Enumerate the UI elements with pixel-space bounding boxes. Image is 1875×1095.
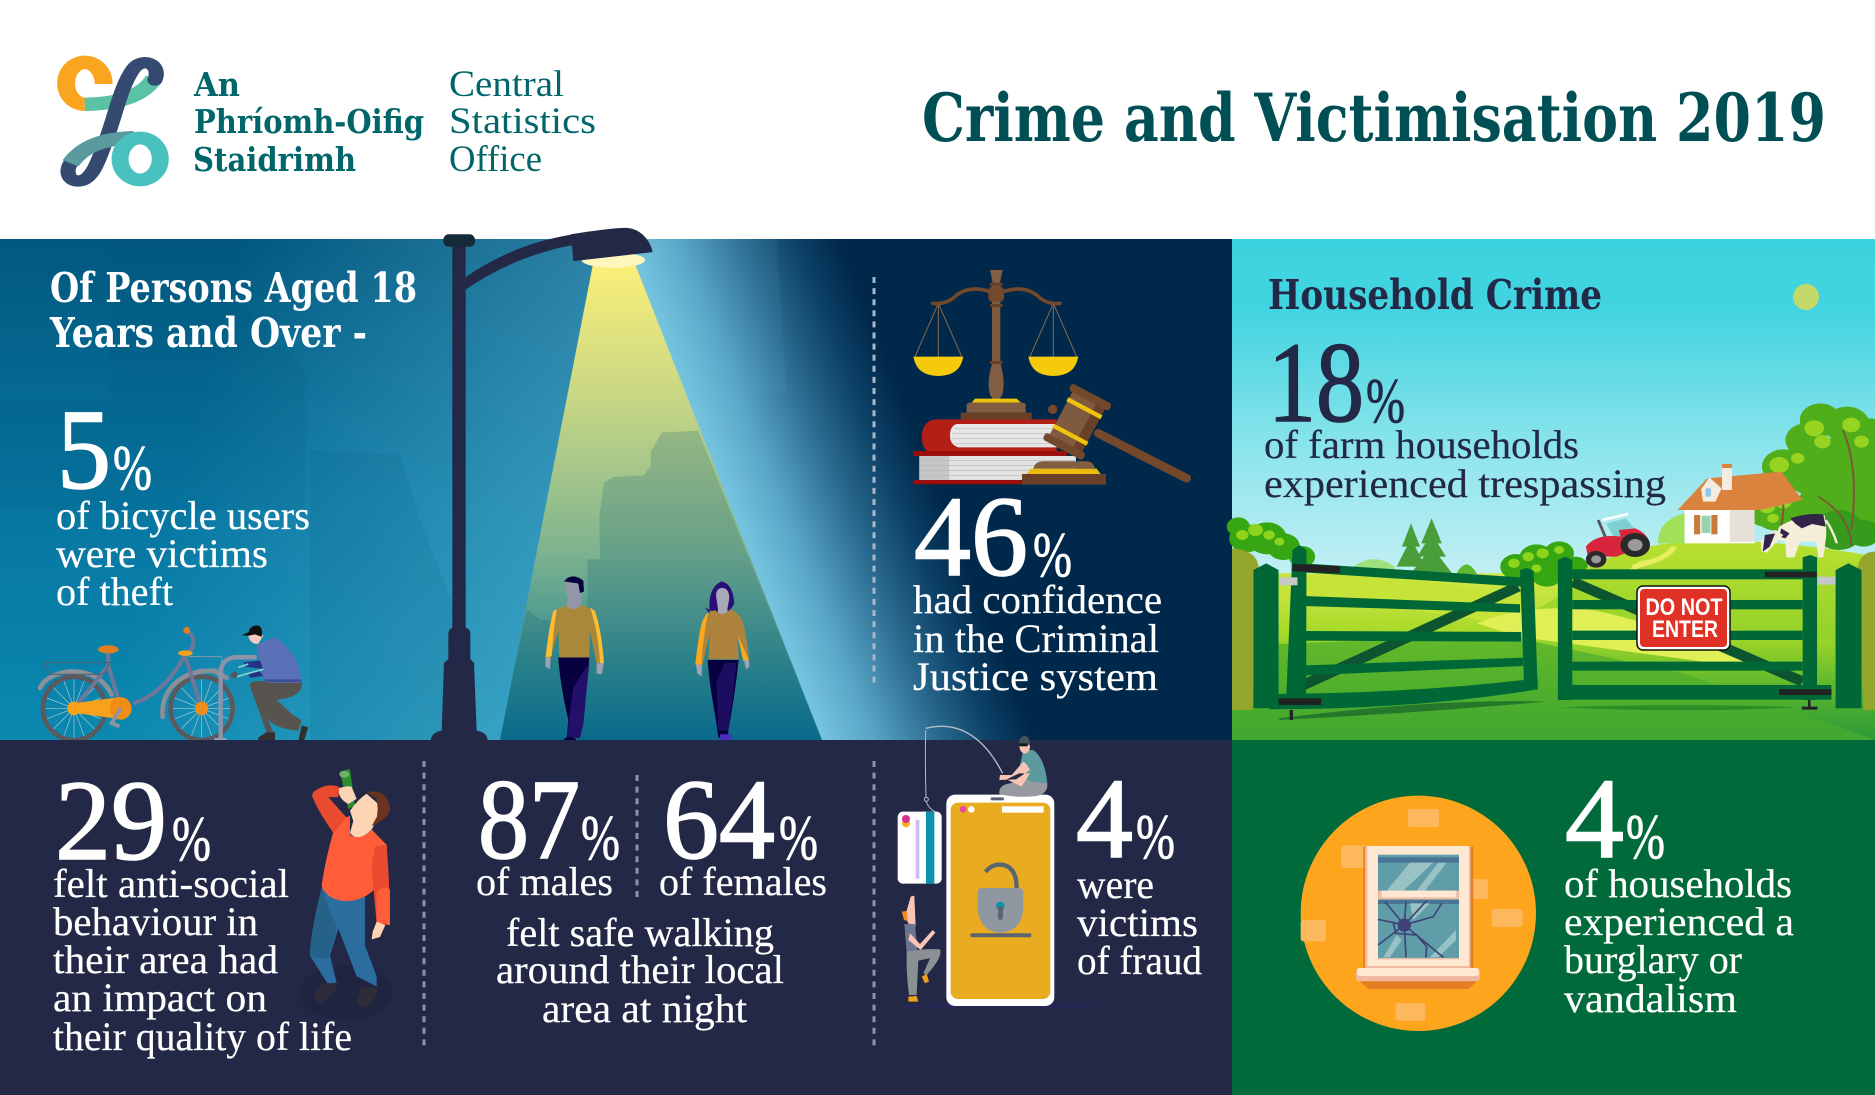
stat: 18% farm trespassing: of farm households	[1264, 422, 1579, 467]
stat: 4% burglary or vandalism: 4	[1565, 755, 1624, 882]
icon: scales of justice with books and gavel	[913, 270, 1187, 485]
stat: 18% farm trespassing	[1264, 319, 1666, 506]
farmhouse	[1658, 464, 1803, 543]
stat: 29% anti-social behaviour	[53, 757, 352, 1059]
dotted divider: third column	[872, 761, 876, 1048]
stat: 29% anti-social behaviour: their quality of life	[53, 1014, 352, 1059]
stat: 5% bicycle theft: of theft	[56, 569, 173, 614]
heading: of persons aged 18 years and over: Years and Over -	[49, 309, 367, 357]
thief	[231, 625, 308, 741]
stat: 29% anti-social behaviour: behaviour in	[53, 899, 258, 944]
logo English name: Statistics	[449, 101, 596, 142]
stat: 5% bicycle theft: 5	[57, 386, 111, 513]
icon: sun	[1793, 284, 1819, 310]
logo English name	[449, 64, 596, 180]
icon: broken window in orange circle	[1301, 796, 1536, 1031]
stat: 4% victims of fraud: %	[1136, 801, 1175, 872]
stat: 46% confidence in justice system: had confidence	[913, 577, 1162, 622]
stat: 87% of males and 64% of females felt safe: %	[581, 802, 620, 873]
stat: 5% bicycle theft: were victims	[56, 531, 268, 576]
climbing person	[902, 896, 941, 1002]
dotted divider: first column	[422, 761, 426, 1048]
stat: 87% of males and 64% of females felt safe: %	[779, 802, 818, 873]
heading: of persons aged 18 years and over: Of Persons Aged 18	[50, 264, 417, 312]
credit card on hook	[898, 730, 942, 884]
hedges	[1232, 548, 1875, 710]
header background	[0, 0, 1875, 239]
smartphone	[946, 795, 1054, 1006]
distant hills	[1232, 573, 1534, 633]
stat: 5% bicycle theft: of bicycle users	[56, 493, 310, 538]
stat: 4% victims of fraud: were	[1077, 862, 1154, 907]
shared caption: felt safe walking	[506, 910, 774, 955]
stat: 46% confidence in justice system: 46	[914, 473, 1028, 600]
stat: 5% bicycle theft: %	[113, 432, 152, 503]
stat: 4% burglary or vandalism: experienced a	[1564, 899, 1794, 944]
panel: household crime farm scene	[1227, 239, 1875, 740]
icon: phone fraud with fishing thief	[898, 726, 1089, 1006]
stat: 4% burglary or vandalism: %	[1626, 801, 1665, 872]
books	[913, 419, 1076, 484]
panel: night street scene	[0, 239, 1232, 740]
fishing thief	[926, 726, 1047, 797]
tree on right	[1748, 403, 1875, 550]
heading: of persons aged 18 years and over	[49, 264, 417, 357]
stat: 4% burglary or vandalism: of households	[1564, 861, 1792, 906]
stat: 87% of males and 64% of females felt safe: of males	[476, 859, 613, 904]
man	[545, 576, 604, 746]
cow	[1761, 514, 1837, 557]
tractor	[1586, 514, 1650, 568]
sign: do not enter: ENTER	[1652, 616, 1718, 643]
logo: Central Statistics Office	[66, 62, 596, 181]
street light beam	[500, 264, 822, 740]
heading: household crime: Household Crime	[1268, 271, 1602, 319]
logo Irish name: An	[193, 65, 240, 104]
stat: 46% confidence in justice system: Justice system	[913, 654, 1158, 699]
stat: 29% anti-social behaviour: %	[172, 803, 211, 874]
64 percent: 64	[663, 756, 775, 883]
logo mark	[66, 62, 160, 181]
baseline	[903, 1005, 1089, 1007]
stat: 18% farm trespassing: %	[1366, 365, 1405, 436]
stat: 4% victims of fraud: victims	[1077, 900, 1198, 945]
logo Irish name: Staidrimh	[193, 140, 356, 179]
logo Irish name	[193, 65, 424, 179]
stat: 4% victims of fraud	[1076, 755, 1202, 983]
stat: 46% confidence in justice system: in the Criminal	[913, 616, 1159, 661]
stat: 4% burglary or vandalism: burglary or	[1564, 937, 1742, 982]
stat: 29% anti-social behaviour: felt anti-social	[53, 861, 289, 906]
left gate	[1253, 545, 1538, 720]
people walking	[545, 576, 749, 749]
stat: 18% farm trespassing: 18	[1268, 319, 1364, 446]
dotted divider: upper right column	[872, 277, 876, 684]
woman	[695, 581, 749, 749]
faint skyline left	[0, 239, 455, 740]
glass cracks	[1378, 901, 1443, 957]
stat: 87% of males and 64% of females felt safe: area at night	[542, 986, 747, 1031]
logo English name: Central	[449, 64, 564, 105]
background trees	[1227, 517, 1588, 587]
logo Irish name: Phríomh-Oifig	[194, 102, 424, 141]
stat: 5% bicycle theft	[56, 386, 310, 614]
bricks	[1301, 809, 1523, 1021]
stat: 87% of males and 64% of females felt safe	[476, 756, 827, 1031]
stat: 87% of males and 64% of females felt safe: around their local	[496, 947, 784, 992]
stat: 87% of males and 64% of females felt safe: of females	[659, 859, 827, 904]
stat: 4% burglary or vandalism	[1564, 755, 1794, 1021]
stat: 4% victims of fraud: 4	[1076, 755, 1133, 882]
stat: 18% farm trespassing: experienced trespassing	[1264, 461, 1666, 506]
faint skyline right	[640, 239, 787, 424]
stat: 46% confidence in justice system	[913, 473, 1162, 699]
stat: 4% burglary or vandalism: vandalism	[1564, 976, 1737, 1021]
stat: 29% anti-social behaviour: their area had	[53, 937, 278, 982]
icon: bicycle and thief	[40, 625, 308, 742]
panel: lower navy	[0, 740, 1232, 1095]
icon: man drinking from bottle	[299, 769, 392, 1020]
stat: 46% confidence in justice system: %	[1033, 519, 1072, 590]
scales	[913, 270, 1078, 419]
icon: street lamp	[431, 228, 653, 740]
bicycle	[40, 627, 257, 742]
open padlock	[970, 865, 1031, 937]
right gate	[1558, 555, 1861, 710]
87 percent: 87	[478, 756, 580, 883]
logo English name: Office	[449, 139, 542, 180]
panel: lower green	[1232, 740, 1875, 1095]
stat: 29% anti-social behaviour: an impact on	[53, 975, 267, 1020]
stat: 29% anti-social behaviour: 29	[55, 757, 167, 884]
gavel	[1022, 383, 1187, 485]
sill	[1357, 978, 1480, 989]
window frame	[1363, 847, 1473, 972]
sign: do not enter: DO NOT	[1646, 594, 1723, 621]
stat: 4% victims of fraud: of fraud	[1077, 938, 1202, 983]
sign: do not enter	[1637, 586, 1730, 650]
